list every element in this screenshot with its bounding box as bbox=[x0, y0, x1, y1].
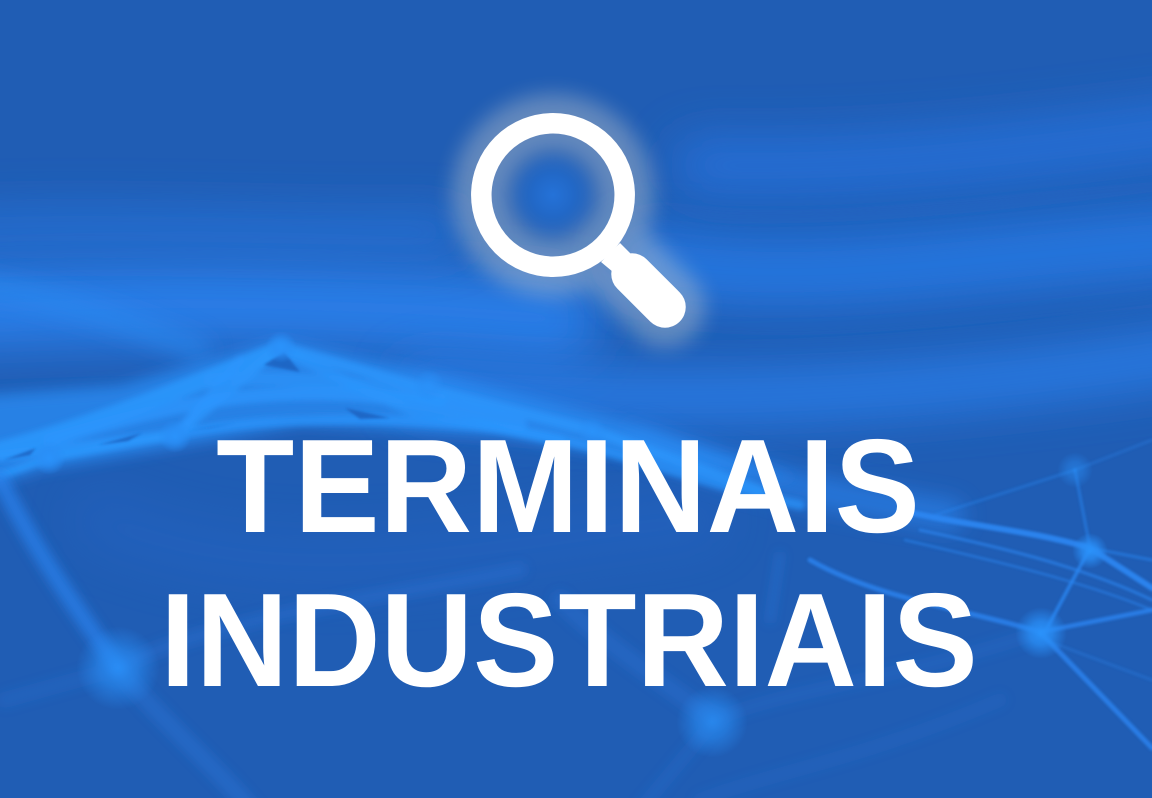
icon: magnifying glass bbox=[481, 123, 665, 307]
network mesh: blurred lower lines bbox=[0, 480, 1040, 798]
title line 2: INDUSTRIAIS bbox=[160, 566, 978, 715]
network nodes bbox=[32, 331, 1108, 758]
icon ring bbox=[481, 123, 625, 267]
icon glow bbox=[481, 123, 665, 307]
network mesh: right lines bbox=[810, 440, 1152, 748]
title bbox=[160, 412, 978, 715]
icon neck bbox=[601, 243, 631, 272]
network mesh: dark gaps bbox=[4, 352, 390, 460]
icon lens tint bbox=[508, 150, 598, 240]
icon handle bbox=[632, 274, 665, 307]
title line 1: TERMINAIS bbox=[216, 412, 920, 561]
network haze: left mesh body bbox=[0, 340, 800, 490]
network mesh: left peak bbox=[0, 347, 800, 505]
